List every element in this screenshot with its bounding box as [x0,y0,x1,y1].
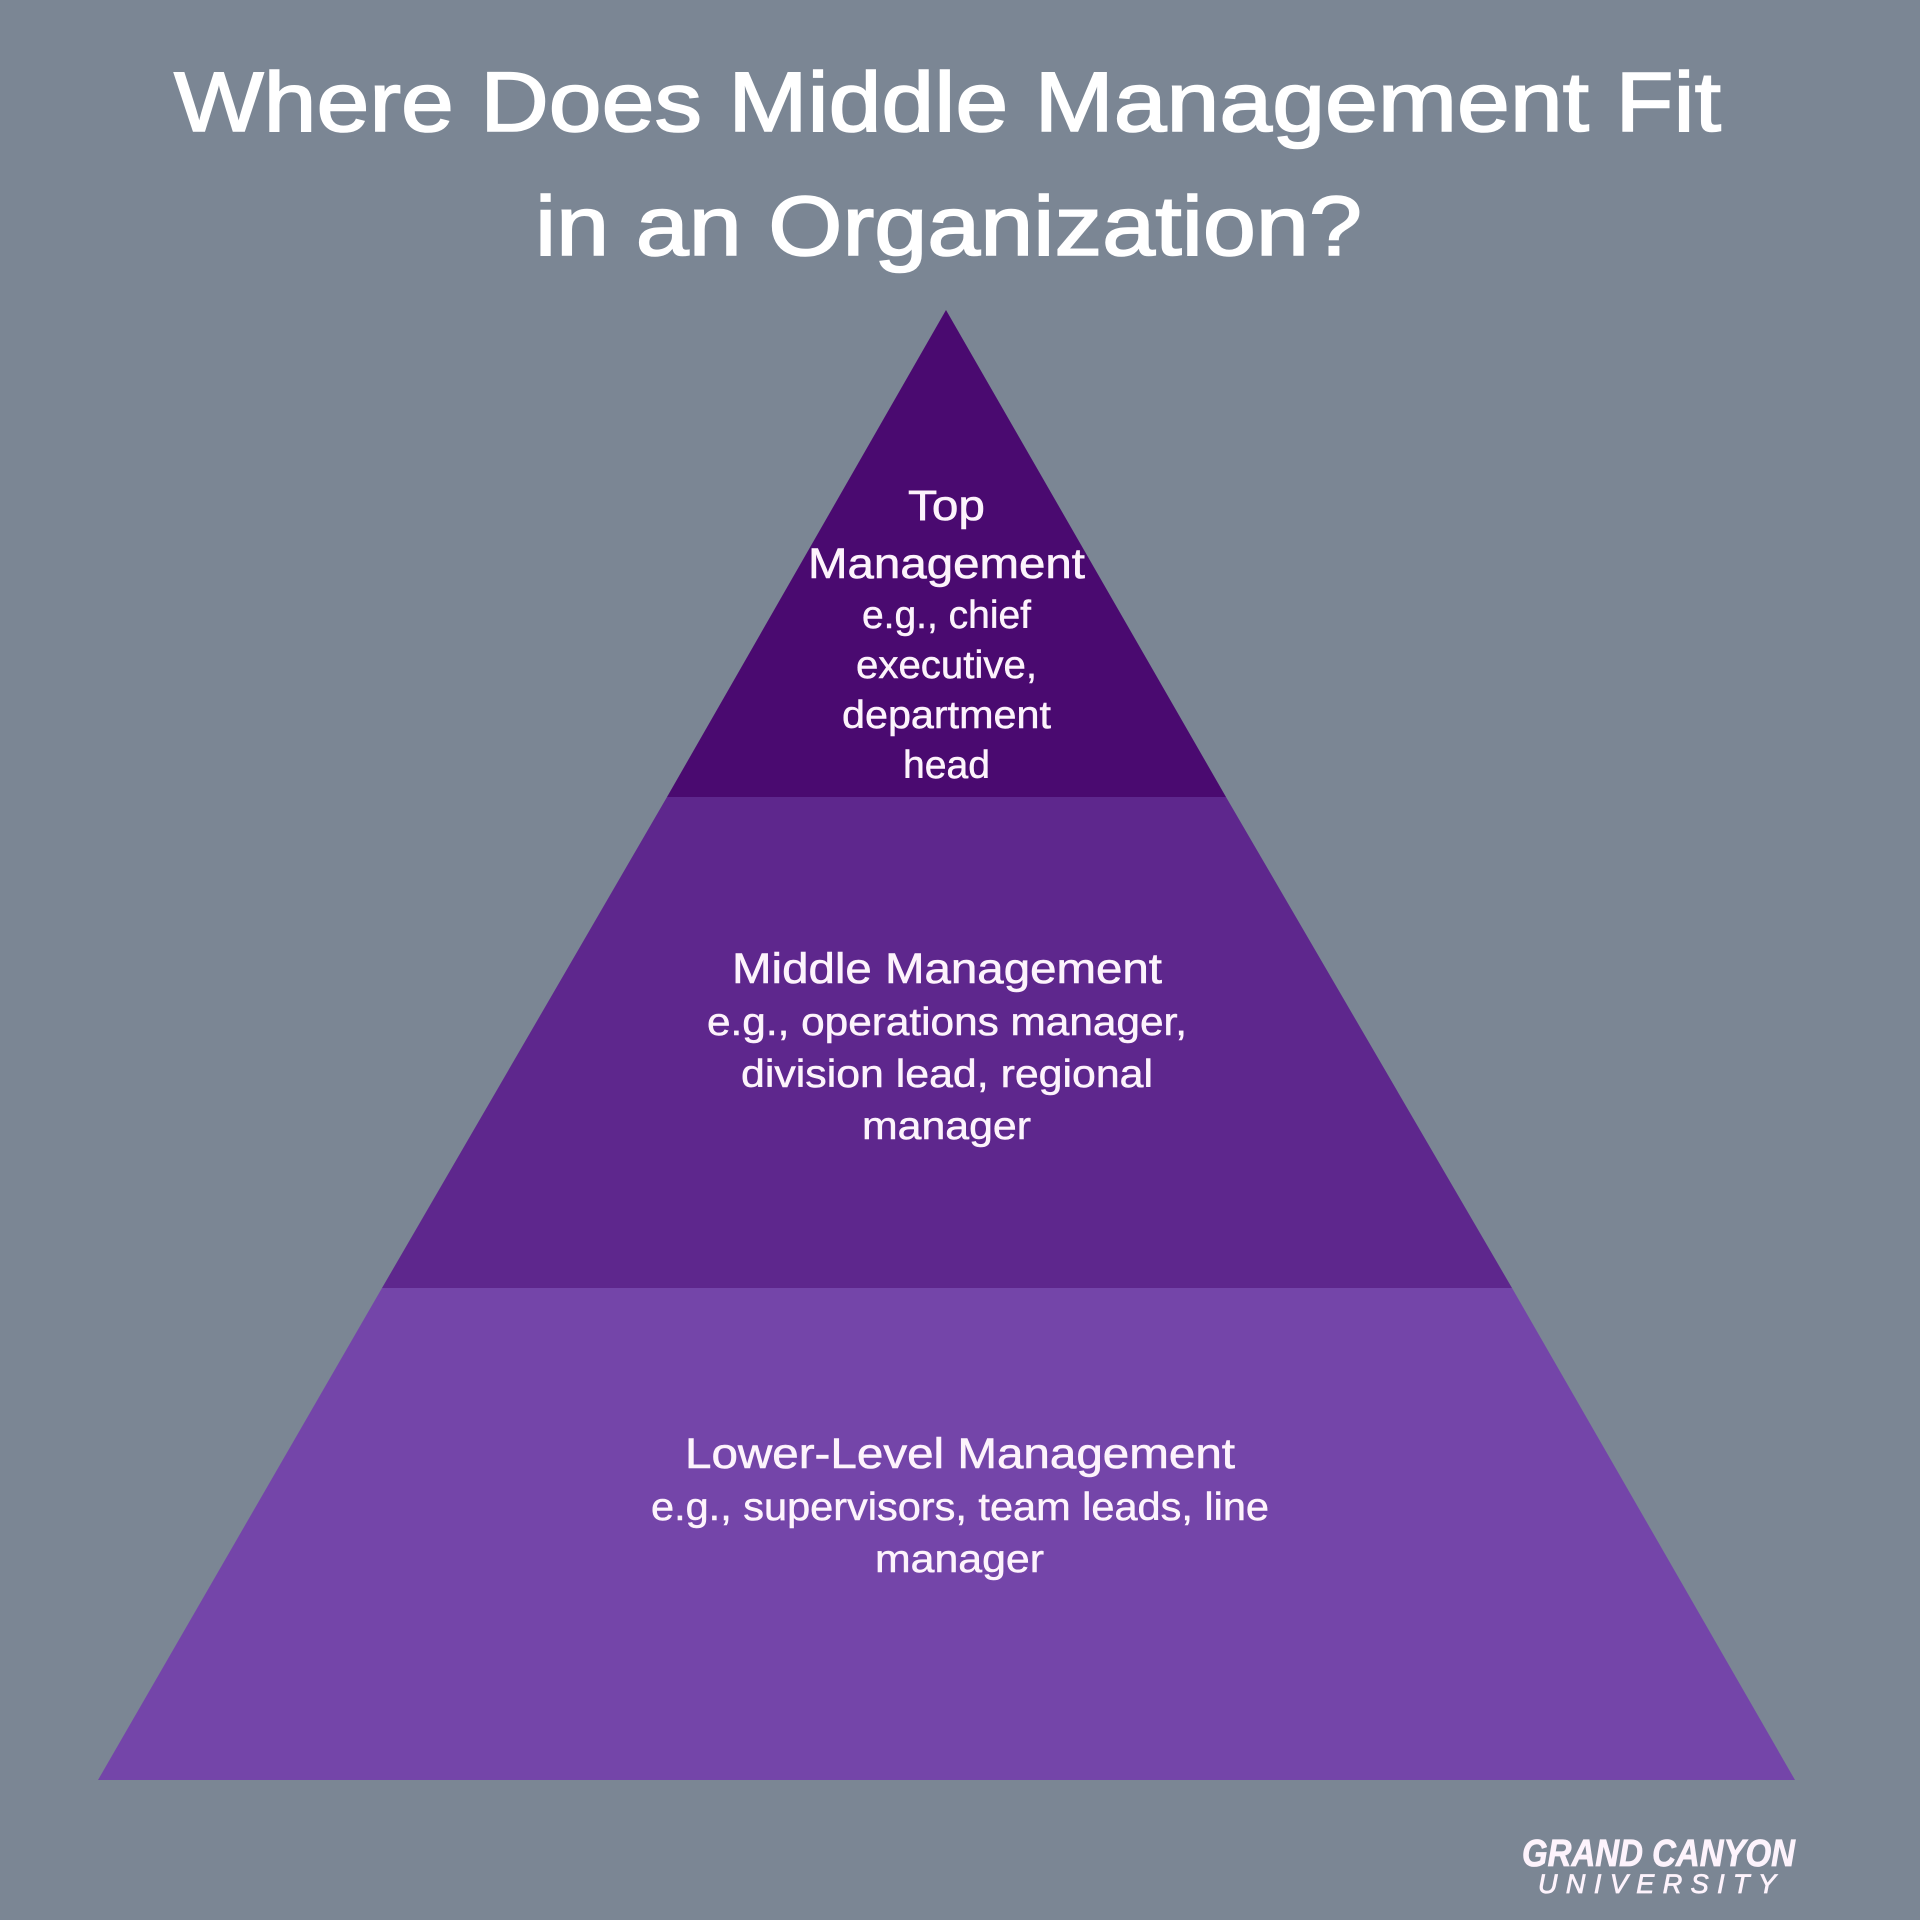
top management heading: Top [908,482,985,530]
middle management heading: Middle Management [732,945,1162,993]
title: in an Organization? [535,179,1362,273]
lower-level management examples: manager [875,1538,1044,1581]
middle management examples: e.g., operations manager, [707,1001,1187,1044]
top management heading: Management [808,540,1085,588]
top management examples [842,594,1051,787]
lower-level management examples: e.g., supervisors, team leads, line [651,1486,1269,1529]
title [174,55,1721,273]
pyramid tier: middle management [382,797,1512,1288]
top management examples: e.g., chief [862,594,1031,637]
title: Where Does Middle Management Fit [174,55,1721,149]
logo: Grand Canyon University [1522,1833,1796,1899]
top management examples: department [842,694,1051,737]
pyramid tier: lower-level management [98,1288,1795,1780]
middle management examples: manager [862,1105,1031,1148]
lower-level management heading: Lower-Level Management [685,1430,1235,1478]
top management examples: executive, [856,644,1037,687]
lower-level management examples [651,1486,1269,1581]
middle management examples [707,1001,1187,1148]
pyramid tier: top management [667,310,1226,797]
middle management examples: division lead, regional [741,1053,1153,1096]
logo: Grand Canyon University: UNIVERSITY [1538,1869,1778,1899]
top management heading [808,482,1085,588]
top management examples: head [903,744,990,787]
logo: Grand Canyon University: GRAND CANYON [1522,1833,1796,1875]
